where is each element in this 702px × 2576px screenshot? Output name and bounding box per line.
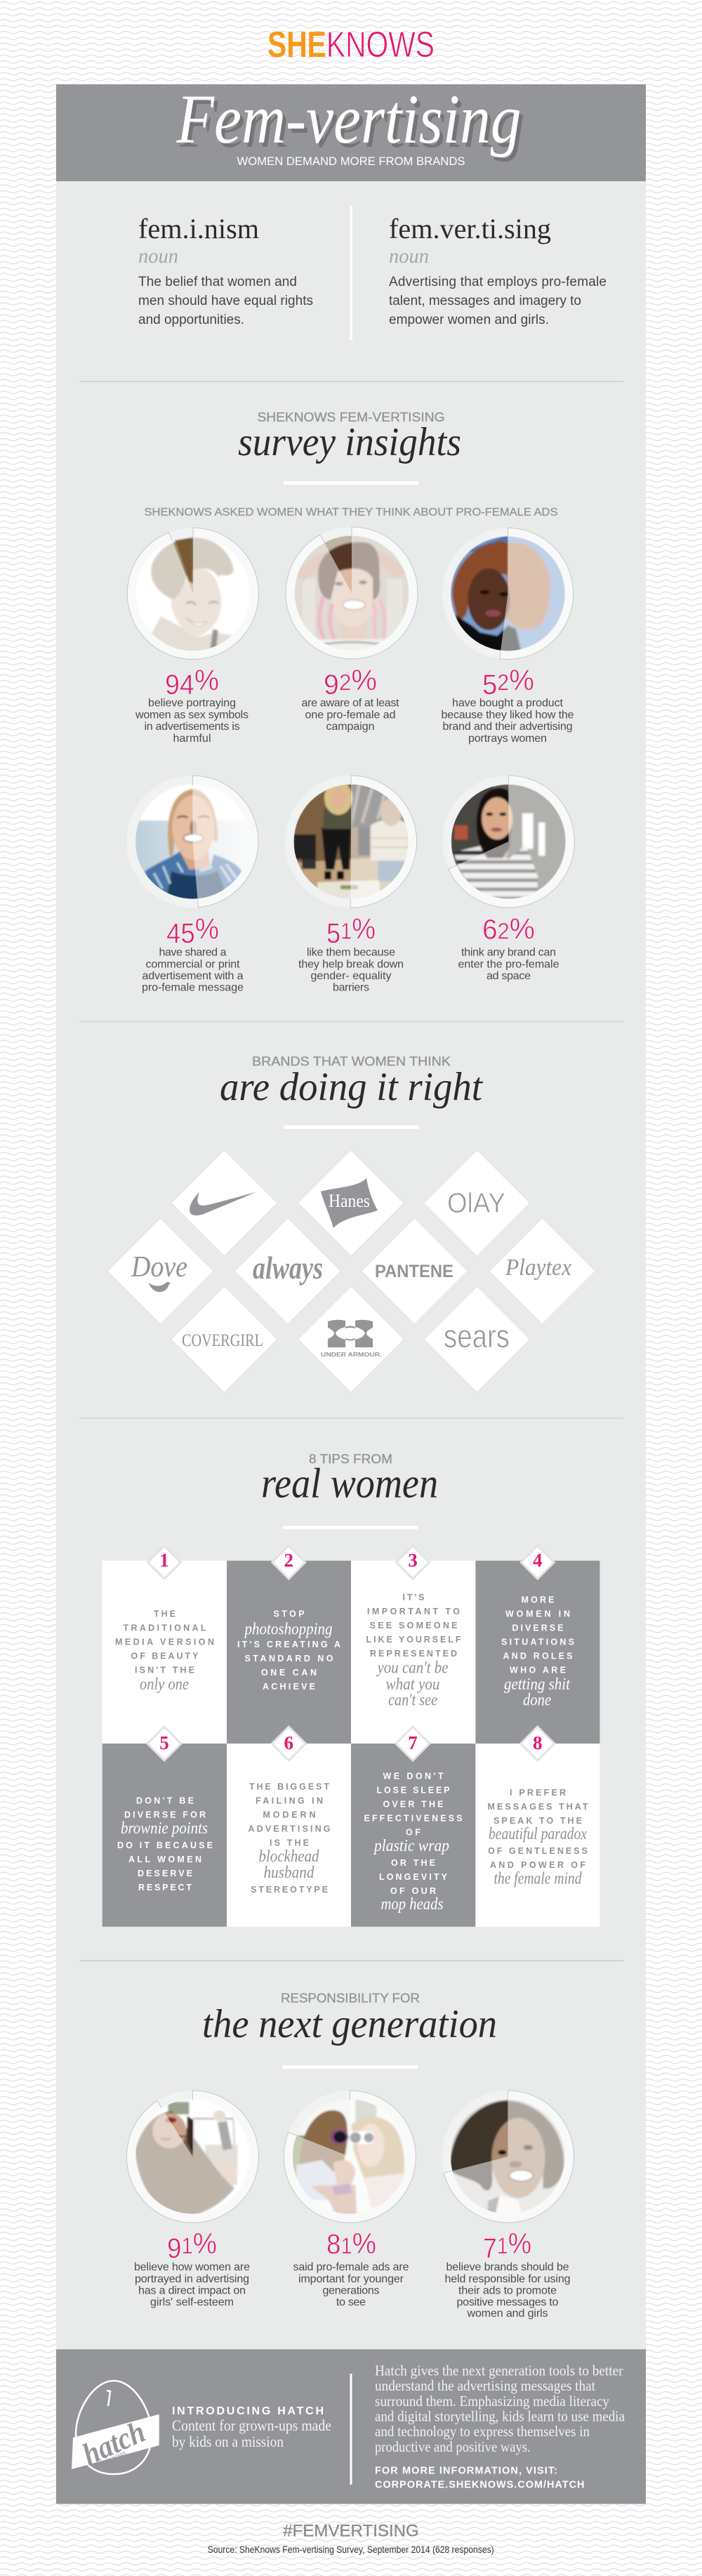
stat 52% (441, 528, 574, 745)
value: % (193, 2227, 217, 2260)
heading: survey insights: survey insights (238, 420, 461, 464)
caption: are aware of at least (302, 697, 399, 710)
tip 8 (475, 1744, 600, 1927)
caption (142, 947, 244, 993)
value: 5 (482, 669, 497, 700)
photo pie 45% (126, 776, 258, 908)
description: Hatch gives the next generation tools to better (375, 2362, 623, 2379)
tip 2: IT'S CREATING A (237, 1640, 340, 1649)
caption (441, 697, 574, 745)
definition: femvertising: noun (389, 244, 429, 268)
tip 3 (351, 1561, 475, 1744)
photo pie 52% (442, 528, 574, 659)
caption: think any brand can (461, 947, 556, 958)
tip 6: MODERN (263, 1810, 316, 1820)
heading: are doing it right: are doing it right (220, 1065, 483, 1109)
stat 51% (285, 776, 417, 993)
photo pie 62% (442, 776, 574, 908)
caption: portrays women (468, 733, 547, 745)
tip 7: mop heads (380, 1895, 444, 1914)
definition: femvertising: talent, messages and imagery to (389, 294, 581, 308)
number badges: 8 (533, 1732, 542, 1753)
caption: portrayed in advertising (135, 2273, 249, 2285)
tip 6: THE BIGGEST (249, 1782, 329, 1792)
caption (134, 2261, 250, 2308)
tip 2: ONE CAN (261, 1668, 317, 1678)
stat 94% (127, 528, 258, 745)
photo pie 92% (286, 527, 418, 659)
tip 3: LIKE YOURSELF (366, 1635, 461, 1645)
tip 8: SPEAK TO THE (494, 1816, 582, 1826)
caption: has a direct impact on (138, 2284, 246, 2297)
definition: feminism: The belief that women and (138, 275, 297, 289)
logo: Dove: Dove (131, 1251, 187, 1283)
tip 7 (351, 1744, 475, 1927)
caption (293, 2261, 409, 2308)
definition: feminism: and opportunities. (138, 313, 244, 327)
stat 45% (126, 776, 258, 993)
header banner (56, 80, 646, 181)
heading: the next generation: the next generation (202, 2002, 497, 2046)
tip 1: MEDIA VERSION (115, 1637, 214, 1647)
definition: femvertising: Advertising that employs pro-female (389, 275, 607, 289)
heading: the next generation (202, 1991, 497, 2069)
caption: positive messages to (456, 2296, 559, 2308)
caption (458, 947, 559, 982)
tip 6: blockhead (258, 1848, 319, 1866)
caption: women and girls (466, 2308, 548, 2320)
logo: Sears: sears (444, 1318, 510, 1354)
tip 5: RESPECT (138, 1883, 192, 1892)
caption: brand and their advertising (442, 721, 573, 733)
caption: have bought a product (452, 697, 564, 710)
description: CORPORATE.SHEKNOWS.COM/HATCH (375, 2480, 584, 2491)
tip 6 (227, 1744, 351, 1927)
definition: feminism: men should have equal rights (138, 294, 313, 308)
tip 1: OF BEAUTY (131, 1652, 199, 1661)
icon: hatch egg logo: hatch (77, 2414, 150, 2472)
caption (298, 947, 404, 993)
logo: Nike swoosh (190, 1192, 256, 1215)
value: 1 (181, 2233, 193, 2258)
value: % (351, 663, 377, 697)
value: % (194, 663, 219, 697)
tip 2: STANDARD NO (244, 1654, 333, 1663)
description: understand the advertising messages that (375, 2377, 595, 2394)
value: 7 (483, 2233, 497, 2264)
photo pie 81% (284, 2091, 416, 2223)
definition: feminism: fem.i.nism (138, 213, 259, 244)
description: productive and positive ways. (375, 2438, 531, 2455)
logo: SheKnows: SHEKNOWS (267, 25, 435, 65)
value: 81% (326, 2227, 376, 2260)
heading: are doing it right (220, 1054, 483, 1129)
number badges: 5 (159, 1732, 169, 1753)
tips grid (102, 1545, 600, 1927)
tip 5: DESERVE (138, 1869, 192, 1878)
tip 4: AND ROLES (503, 1652, 573, 1661)
value: 2 (339, 670, 351, 695)
heading: the next generation: RESPONSIBILITY FOR (281, 1991, 420, 2005)
caption: in advertisements is (145, 721, 240, 733)
intro text (172, 2405, 331, 2450)
tip 5: DIVERSE FOR (124, 1810, 206, 1820)
tip 5: ALL WOMEN (128, 1855, 201, 1864)
tip 5: DON'T BE (136, 1796, 194, 1806)
caption: women as sex symbols (135, 710, 249, 721)
logo: Pantene: PANTENE (375, 1262, 453, 1281)
definition: feminism (138, 213, 313, 327)
tip 4: WHO ARE (510, 1666, 566, 1675)
tip 7: OF (406, 1828, 420, 1838)
brand logos grid (107, 1150, 595, 1392)
number badges: 3 (408, 1550, 418, 1571)
hatch panel (56, 2349, 646, 2504)
value: 9 (324, 669, 339, 700)
value: % (352, 912, 376, 946)
definition: femvertising: empower women and girls. (389, 313, 549, 327)
logo: Under Armour (321, 1320, 382, 1358)
tip 7: OR THE (391, 1858, 435, 1868)
tip 8: beautiful paradox (489, 1825, 587, 1843)
icon: hatch egg logo (72, 2381, 159, 2474)
tip 4: WOMEN IN (505, 1609, 570, 1619)
brand diamonds (107, 1150, 595, 1392)
tip 6: STEREOTYPE (251, 1885, 328, 1895)
tip 2: ACHIEVE (263, 1682, 315, 1692)
caption (135, 697, 249, 745)
tip 8: the female mind (494, 1870, 582, 1888)
tip 7: OVER THE (383, 1800, 444, 1810)
tip 3: IMPORTANT TO (367, 1607, 460, 1616)
tip 1: ISN'T THE (135, 1666, 194, 1675)
main panel background (56, 84, 646, 2504)
value: 2 (497, 670, 509, 695)
caption: believe portraying (148, 697, 236, 710)
tip 8: AND POWER OF (490, 1860, 585, 1870)
caption: ad space (486, 970, 531, 982)
caption: their ads to promote (458, 2284, 557, 2297)
value: % (508, 2227, 531, 2260)
caption: advertisement with a (142, 970, 244, 982)
value: 94 (165, 669, 194, 700)
subtitle: WOMEN DEMAND MORE FROM BRANDS (237, 155, 465, 168)
tip 6: IS THE (270, 1838, 309, 1848)
tip 4: DIVERSE (512, 1623, 563, 1633)
tip 7: WE DON'T (383, 1772, 444, 1781)
tip 2: photoshopping (244, 1621, 333, 1639)
caption: believe brands should be (446, 2261, 569, 2273)
number badges: 2 (284, 1550, 293, 1571)
definition: feminism: noun (138, 244, 178, 268)
logo: Under Armour: UNDER ARMOUR. (321, 1352, 382, 1358)
caption: believe how women are (134, 2261, 250, 2273)
photo pie 91% (126, 2091, 258, 2223)
description: and technology to express themselves in (375, 2423, 590, 2440)
tip 5 (102, 1744, 227, 1927)
caption: have shared a (159, 947, 227, 958)
number badges (147, 1545, 555, 1760)
logo: Hanes (321, 1178, 378, 1228)
intro text: INTRODUCING HATCH (172, 2405, 324, 2417)
caption: pro-female message (142, 982, 244, 993)
tip 4: getting shit (504, 1675, 571, 1694)
caption: girls' self-esteem (150, 2296, 234, 2308)
caption: to see (336, 2296, 366, 2308)
caption (445, 2261, 570, 2320)
description: FOR MORE INFORMATION, VISIT: (375, 2466, 557, 2477)
stat 71% (442, 2091, 574, 2320)
tip 2 (227, 1561, 351, 1744)
value: 5 (326, 918, 340, 949)
logo: CoverGirl: COVERGIRL (182, 1331, 263, 1350)
intro text: by kids on a mission (172, 2433, 284, 2450)
tip 6: husband (264, 1864, 314, 1882)
value: % (195, 912, 219, 946)
tip 7: plastic wrap (373, 1837, 449, 1855)
caption: because they liked how the (441, 710, 574, 721)
definition: femvertising: fem.ver.ti.sing (389, 213, 551, 244)
heading: survey insights: SHEKNOWS FEM-VERTISING (257, 410, 445, 424)
logo: always: always (253, 1250, 323, 1286)
description: surround them. Emphasizing media literacy (375, 2393, 609, 2410)
number badges: 1 (159, 1550, 169, 1571)
caption: held responsible for using (445, 2273, 570, 2285)
caption: one pro-female ad (305, 710, 396, 721)
description (375, 2362, 625, 2491)
definition: femvertising (389, 213, 607, 327)
description: and digital storytelling, kids learn to use media (375, 2408, 625, 2425)
tip 5: brownie points (121, 1819, 208, 1838)
caption: harmful (173, 733, 211, 745)
tip 7: LONGEVITY (379, 1872, 448, 1882)
tip 3: SEE SOMEONE (369, 1621, 458, 1630)
caption: barriers (333, 982, 369, 993)
tip 4 (475, 1561, 600, 1744)
heading: survey insights (238, 410, 461, 485)
icon: hatch egg logo: by SHEKNOWS (93, 2450, 128, 2470)
tip 1: TRADITIONAL (124, 1623, 206, 1633)
intro text: Content for grown-ups made (172, 2417, 331, 2434)
caption: they help break down (298, 958, 404, 971)
tip 3: can't see (388, 1692, 437, 1710)
tip 1: THE (154, 1609, 176, 1619)
tip 4: done (523, 1692, 551, 1710)
logo: Hanes: Hanes (329, 1191, 370, 1211)
value: 45 (166, 918, 195, 949)
caption: like them because (307, 947, 395, 958)
tip 5: DO IT BECAUSE (117, 1841, 213, 1850)
caption (302, 697, 399, 733)
photo pie 94% (127, 528, 258, 659)
tip 8: I PREFER (510, 1788, 566, 1798)
tip 6: FAILING IN (256, 1796, 323, 1806)
caption: commercial or print (146, 958, 240, 971)
number badges: 7 (408, 1732, 418, 1753)
tip 3: IT'S (403, 1593, 424, 1602)
heading: are doing it right: BRANDS THAT WOMEN THINK (252, 1054, 451, 1068)
stat 92% (286, 527, 418, 733)
value: 1 (497, 2233, 508, 2258)
number badges: 6 (284, 1732, 293, 1753)
heading: real women: 8 TIPS FROM (309, 1452, 392, 1466)
tip 3: REPRESENTED (370, 1649, 457, 1659)
stat 81% (284, 2091, 416, 2308)
tip 8: MESSAGES THAT (487, 1802, 588, 1812)
tip 6: ADVERTISING (249, 1824, 330, 1834)
tip 4: MORE (521, 1595, 555, 1605)
stat 91% (126, 2091, 258, 2308)
tip 7: EFFECTIVENESS (364, 1814, 462, 1824)
tip 7: LOSE SLEEP (376, 1786, 449, 1796)
tip 2: STOP (274, 1609, 305, 1619)
heading: real women (261, 1452, 438, 1529)
logo: Playtex: Playtex (505, 1255, 571, 1281)
value: % (509, 663, 534, 697)
value: 62% (482, 912, 535, 946)
caption: important for younger (298, 2273, 404, 2285)
source: Source: SheKnows Fem-vertising Survey, September 2014 (628 responses) (208, 2544, 494, 2555)
title: Fem-vertising (176, 80, 521, 158)
tip 4: SITUATIONS (501, 1637, 574, 1647)
value: 9 (167, 2233, 181, 2264)
caption: said pro-female ads are (293, 2261, 409, 2273)
tip 1 (102, 1561, 227, 1744)
number badges: 4 (533, 1550, 542, 1571)
value: 1 (340, 919, 352, 944)
photo pie 51% (285, 776, 417, 908)
caption: enter the pro-female (458, 958, 559, 971)
tip 7: OF OUR (390, 1886, 436, 1896)
hashtag: #FEMVERTISING (283, 2522, 419, 2540)
caption: campaign (326, 721, 375, 733)
tip 3: what you (386, 1675, 439, 1694)
stat 62% (442, 776, 574, 982)
caption: gender- equality (310, 970, 392, 982)
tip 8: OF GENTLENESS (488, 1846, 588, 1856)
definitions (138, 206, 607, 340)
subheading: SHEKNOWS ASKED WOMEN WHAT THEY THINK ABOUT PRO-FEMALE ADS (145, 506, 557, 518)
tip 1: only one (140, 1675, 189, 1694)
photo pie 71% (442, 2091, 574, 2223)
heading: real women: real women (261, 1460, 438, 1506)
logo: Olay: OlAY (447, 1188, 505, 1219)
caption: generations (323, 2284, 379, 2297)
tip 3: you can't be (376, 1659, 449, 1678)
